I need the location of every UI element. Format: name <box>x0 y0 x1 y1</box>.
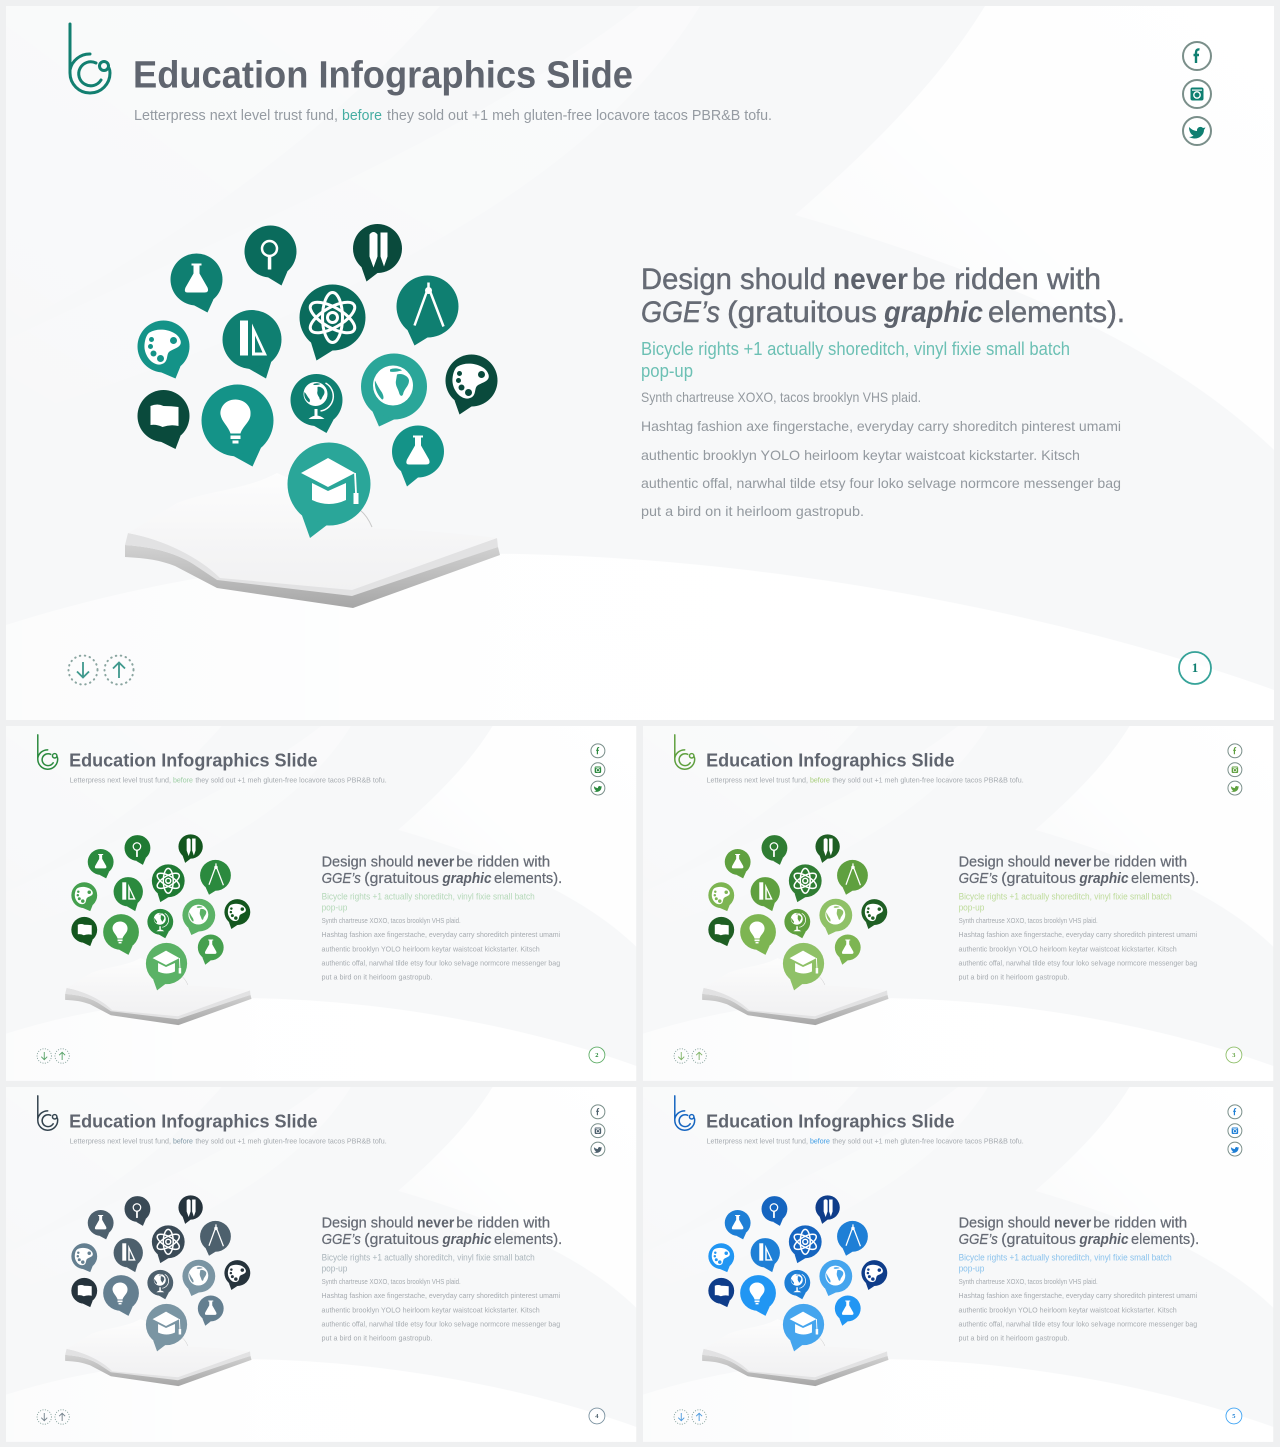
page number: 1 <box>1192 660 1198 675</box>
slide 2 body text: put a bird on it heirloom gastropub. <box>322 974 432 981</box>
header chrome: logo, social icons, nav arrows <box>68 24 1211 684</box>
slide 3 heading <box>959 855 1199 887</box>
heading: Design should <box>641 263 826 296</box>
slide 5 subtitle: before <box>810 1137 830 1146</box>
bubble: palette dark <box>446 354 498 414</box>
slide 2 title: Education Infographics Slide <box>69 750 318 771</box>
slide background <box>6 6 1274 720</box>
slide 5 title: Education Infographics Slide <box>706 1111 955 1132</box>
icon: instagram <box>1183 80 1211 108</box>
slide 2 body text: Hashtag fashion axe fingerstache, everyday carry shoreditch pinterest umami <box>322 932 561 939</box>
slide 4 body text: authentic offal, narwhal tilde etsy four loko selvage normcore messenger bag <box>322 1322 560 1329</box>
slide 5 logo and icons <box>674 1096 1242 1424</box>
subheading: pop-up <box>641 361 693 381</box>
slide 4 body text: Synth chartreuse XOXO, tacos brooklyn VHS plaid. <box>322 1279 461 1286</box>
slide 3 body text: Hashtag fashion axe fingerstache, everyday carry shoreditch pinterest umami <box>959 932 1198 939</box>
slide 5 subtitle <box>707 1137 1024 1146</box>
slide 3 subtitle <box>707 776 1024 785</box>
slide 5 heading: Design should <box>959 1216 1051 1232</box>
icon: twitter <box>1183 117 1211 145</box>
slide 5 subheading: pop-up <box>959 1263 984 1273</box>
slide 2 heading: graphic <box>441 871 492 887</box>
slide 4 heading: GGE’s <box>322 1232 361 1248</box>
slide 5 body text: Synth chartreuse XOXO, tacos brooklyn VHS plaid. <box>959 1279 1098 1286</box>
slide 3 subtitle: before <box>810 776 830 785</box>
slide 5 body text: authentic brooklyn YOLO heirloom keytar waistcoat kickstarter. Kitsch <box>959 1308 1177 1315</box>
bubble: globe <box>361 354 427 426</box>
slide 5 heading: GGE’s <box>959 1232 998 1248</box>
heading: be ridden with <box>912 263 1101 296</box>
slide 2 subtitle: they sold out +1 meh gluten-free locavore tacos PBR&B tofu. <box>195 776 387 785</box>
slide 2 heading: Design should <box>322 855 414 871</box>
slide 3 body text: Synth chartreuse XOXO, tacos brooklyn VHS plaid. <box>959 918 1098 925</box>
slide 4 heading <box>322 1216 562 1248</box>
body text: Hashtag fashion axe fingerstache, everyday carry shoreditch pinterest umami <box>641 418 1121 434</box>
body text: authentic brooklyn YOLO heirloom keytar waistcoat kickstarter. Kitsch <box>641 447 1080 463</box>
icon: facebook <box>1183 42 1211 70</box>
slide 2 subheading <box>322 891 535 912</box>
slide 3 logo and icons <box>674 735 1242 1063</box>
slide 5 subtitle: Letterpress next level trust fund, <box>707 1137 808 1146</box>
bubble: book <box>138 390 190 449</box>
slide 2 page number: 2 <box>595 1052 599 1059</box>
heading: graphic <box>883 296 983 329</box>
slide 3: light green <box>643 726 1273 1081</box>
body text: Synth chartreuse XOXO, tacos brooklyn VHS plaid. <box>641 389 921 405</box>
slide 2 subtitle <box>70 776 387 785</box>
bubble: palette <box>138 320 190 378</box>
slide 2 illustration <box>65 834 252 1025</box>
heading: (gratuitous <box>727 296 877 329</box>
slide 3 subheading: Bicycle rights +1 actually shoreditch, vinyl fixie small batch <box>959 891 1172 901</box>
logo <box>70 24 110 93</box>
slide 3 background <box>643 726 1273 1081</box>
illustration: open book with speech bubbles <box>125 224 500 608</box>
slide 5 heading: (gratuitous <box>1001 1232 1076 1248</box>
slide 2 body text: Synth chartreuse XOXO, tacos brooklyn VHS plaid. <box>322 918 461 925</box>
slide 5 background <box>643 1087 1273 1442</box>
open book <box>125 473 500 608</box>
slide 3 heading: elements). <box>1131 871 1199 887</box>
bubble: compass <box>396 276 458 346</box>
slide 5 heading: elements). <box>1131 1232 1199 1248</box>
bubble: atom <box>300 284 366 360</box>
slide 4 subheading: pop-up <box>322 1263 347 1273</box>
icon: up arrow <box>104 656 134 684</box>
slide 4 body text: put a bird on it heirloom gastropub. <box>322 1335 432 1342</box>
subtitle: before <box>342 108 382 124</box>
slide 3 subheading: pop-up <box>959 902 984 912</box>
slide 3 illustration <box>702 834 888 1025</box>
slide 2 body text <box>322 918 561 981</box>
heading <box>641 263 1125 329</box>
slide 4 logo and icons <box>37 1096 605 1424</box>
slide 3 body text: authentic offal, narwhal tilde etsy four loko selvage normcore messenger bag <box>959 961 1197 968</box>
slide 4 body text: Hashtag fashion axe fingerstache, everyday carry shoreditch pinterest umami <box>322 1293 561 1300</box>
icon: down arrow <box>68 656 98 684</box>
slide 2 heading: (gratuitous <box>364 871 439 887</box>
slide 3 heading: be ridden with <box>1093 855 1187 871</box>
slide 2 subheading: pop-up <box>322 902 347 912</box>
slide 4 subheading: Bicycle rights +1 actually shoreditch, vinyl fixie small batch <box>322 1252 535 1262</box>
slide 5 subheading: Bicycle rights +1 actually shoreditch, vinyl fixie small batch <box>959 1252 1172 1262</box>
slide 2 heading: never <box>417 855 454 871</box>
slide 3 heading: never <box>1054 855 1091 871</box>
slide 5 subtitle: they sold out +1 meh gluten-free locavore tacos PBR&B tofu. <box>832 1137 1024 1146</box>
page number ring <box>1179 652 1211 684</box>
slide 4 subheading <box>322 1252 535 1273</box>
slide 5 body text: Hashtag fashion axe fingerstache, everyday carry shoreditch pinterest umami <box>959 1293 1198 1300</box>
slide 2 subheading: Bicycle rights +1 actually shoreditch, vinyl fixie small batch <box>322 891 535 901</box>
bubble: flask light <box>392 426 444 486</box>
slide 2 heading: GGE’s <box>322 871 361 887</box>
slide 4 illustration <box>65 1195 252 1386</box>
bubble: pens <box>353 224 402 282</box>
slide 5 page number: 5 <box>1232 1413 1236 1420</box>
slide 5 heading: graphic <box>1078 1232 1129 1248</box>
slide 3 heading: Design should <box>959 855 1051 871</box>
slide 3 body text: authentic brooklyn YOLO heirloom keytar waistcoat kickstarter. Kitsch <box>959 947 1177 954</box>
slide 2 subtitle: before <box>173 776 193 785</box>
slide 3 subtitle: Letterpress next level trust fund, <box>707 776 808 785</box>
bubble: magnifier <box>244 226 296 286</box>
slide 2: green <box>6 726 636 1081</box>
slide 3 body text: put a bird on it heirloom gastropub. <box>959 974 1069 981</box>
heading: never <box>833 263 908 296</box>
slide 4 subtitle <box>70 1137 387 1146</box>
slide 4 body text: authentic brooklyn YOLO heirloom keytar waistcoat kickstarter. Kitsch <box>322 1308 540 1315</box>
slide 5 heading <box>959 1216 1199 1248</box>
slide 5 body text: authentic offal, narwhal tilde etsy four loko selvage normcore messenger bag <box>959 1322 1197 1329</box>
title: Education Infographics Slide <box>133 54 633 96</box>
heading: GGE’s <box>641 296 720 329</box>
slide 2 body text: authentic brooklyn YOLO heirloom keytar waistcoat kickstarter. Kitsch <box>322 947 540 954</box>
slide 4 background <box>6 1087 636 1442</box>
slide 1: teal <box>6 6 1274 720</box>
slide 4 subtitle: they sold out +1 meh gluten-free locavore tacos PBR&B tofu. <box>195 1137 387 1146</box>
slide 2 logo and icons <box>37 735 605 1063</box>
slide 5 illustration <box>702 1195 888 1386</box>
bubble: ruler and set square <box>222 310 282 378</box>
slide 2 background <box>6 726 636 1081</box>
slide 4 page number: 4 <box>595 1413 599 1420</box>
slide 2 heading: elements). <box>494 871 562 887</box>
slide 4 heading: never <box>417 1216 454 1232</box>
body text <box>641 389 1121 519</box>
subheading <box>641 339 1070 381</box>
slide 2 heading <box>322 855 562 887</box>
slide 3 heading: graphic <box>1078 871 1129 887</box>
slide 2 heading: be ridden with <box>456 855 550 871</box>
slide 4 heading: graphic <box>441 1232 492 1248</box>
bubble: flask <box>170 254 222 312</box>
bubble: desk globe <box>290 374 342 433</box>
subheading: Bicycle rights +1 actually shoreditch, vinyl fixie small batch <box>641 339 1070 359</box>
slide 3 title: Education Infographics Slide <box>706 750 955 771</box>
slide 4 heading: Design should <box>322 1216 414 1232</box>
slide 4 heading: elements). <box>494 1232 562 1248</box>
bubble: graduation cap <box>288 442 370 538</box>
slide 3 page number: 3 <box>1232 1052 1236 1059</box>
slide 2 subtitle: Letterpress next level trust fund, <box>70 776 171 785</box>
slide 5 subheading <box>959 1252 1172 1273</box>
slide 5 body text: put a bird on it heirloom gastropub. <box>959 1335 1069 1342</box>
body text: put a bird on it heirloom gastropub. <box>641 503 864 519</box>
slide 5 heading: be ridden with <box>1093 1216 1187 1232</box>
slide 4 subtitle: Letterpress next level trust fund, <box>70 1137 171 1146</box>
slide 4 body text <box>322 1279 561 1342</box>
slide 4 heading: be ridden with <box>456 1216 550 1232</box>
slide 5 heading: never <box>1054 1216 1091 1232</box>
slide 5: blue <box>643 1087 1273 1442</box>
subtitle: they sold out +1 meh gluten-free locavore tacos PBR&B tofu. <box>387 108 772 124</box>
body text: authentic offal, narwhal tilde etsy four loko selvage normcore messenger bag <box>641 475 1121 491</box>
slide 3 subheading <box>959 891 1172 912</box>
slide 3 heading: GGE’s <box>959 871 998 887</box>
subtitle <box>134 108 772 124</box>
slide 3 heading: (gratuitous <box>1001 871 1076 887</box>
bubble: light bulb <box>202 384 274 466</box>
slide 5 body text <box>959 1279 1198 1342</box>
slide 4 heading: (gratuitous <box>364 1232 439 1248</box>
slide 4 title: Education Infographics Slide <box>69 1111 318 1132</box>
slide 4: slate gray <box>6 1087 636 1442</box>
subtitle: Letterpress next level trust fund, <box>134 108 338 124</box>
slide 3 subtitle: they sold out +1 meh gluten-free locavore tacos PBR&B tofu. <box>832 776 1024 785</box>
heading: elements). <box>988 296 1125 329</box>
slide 3 body text <box>959 918 1198 981</box>
slide 2 body text: authentic offal, narwhal tilde etsy four loko selvage normcore messenger bag <box>322 961 560 968</box>
slide 4 subtitle: before <box>173 1137 193 1146</box>
